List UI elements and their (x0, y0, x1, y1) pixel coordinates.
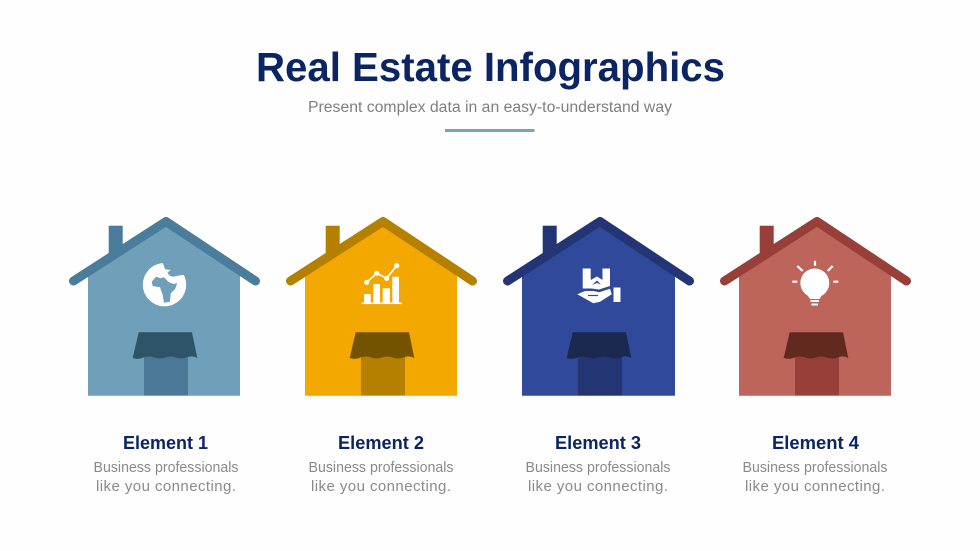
text block: element 3: Element 3 (555, 433, 641, 453)
icon: light bulb (792, 261, 838, 304)
text block: element 4: Business professionals (742, 459, 888, 476)
text block: element 2: like you connecting. (311, 478, 451, 495)
door (795, 352, 839, 396)
house body (739, 222, 891, 396)
title divider (445, 129, 534, 132)
chimney (109, 226, 123, 256)
text block: element 1: like you connecting. (96, 478, 236, 495)
awning (350, 332, 414, 359)
house body (305, 222, 457, 396)
house body (522, 222, 675, 396)
text block: element 1: Business professionals (94, 459, 238, 476)
icon: bar chart with trend line (362, 263, 402, 304)
panel: element 1 house (74, 222, 256, 396)
text block: element 2: Element 2 (338, 433, 424, 453)
awning (567, 332, 631, 359)
chimney (760, 226, 774, 256)
text block: element 4: like you connecting. (745, 478, 885, 495)
text block: element 2 (308, 433, 454, 495)
door (144, 352, 188, 396)
text block: element 4 (742, 433, 888, 495)
roof (508, 222, 690, 281)
door (361, 352, 405, 396)
icon: hand holding buildings (577, 268, 620, 303)
house body (88, 222, 240, 396)
panel: element 3 house (508, 222, 690, 396)
roof (724, 222, 906, 281)
roof (74, 222, 256, 281)
text block: element 3 (526, 433, 670, 495)
text block: element 4: Element 4 (772, 433, 859, 453)
icon: globe (143, 262, 188, 306)
text block: element 3: like you connecting. (528, 478, 668, 495)
text block: element 3: Business professionals (526, 459, 670, 476)
panel: element 4 house (724, 222, 906, 396)
title: Real Estate Infographics (256, 44, 725, 90)
text block: element 1 (94, 433, 238, 495)
chimney (326, 226, 340, 256)
awning (133, 332, 197, 359)
text block: element 2: Business professionals (308, 459, 454, 476)
roof (290, 222, 472, 281)
panel: element 2 house (290, 222, 472, 396)
door (578, 352, 622, 396)
text block: element 1: Element 1 (123, 433, 208, 453)
subtitle: Present complex data in an easy-to-understand way (308, 99, 672, 116)
awning (784, 332, 848, 359)
chimney (543, 226, 557, 256)
